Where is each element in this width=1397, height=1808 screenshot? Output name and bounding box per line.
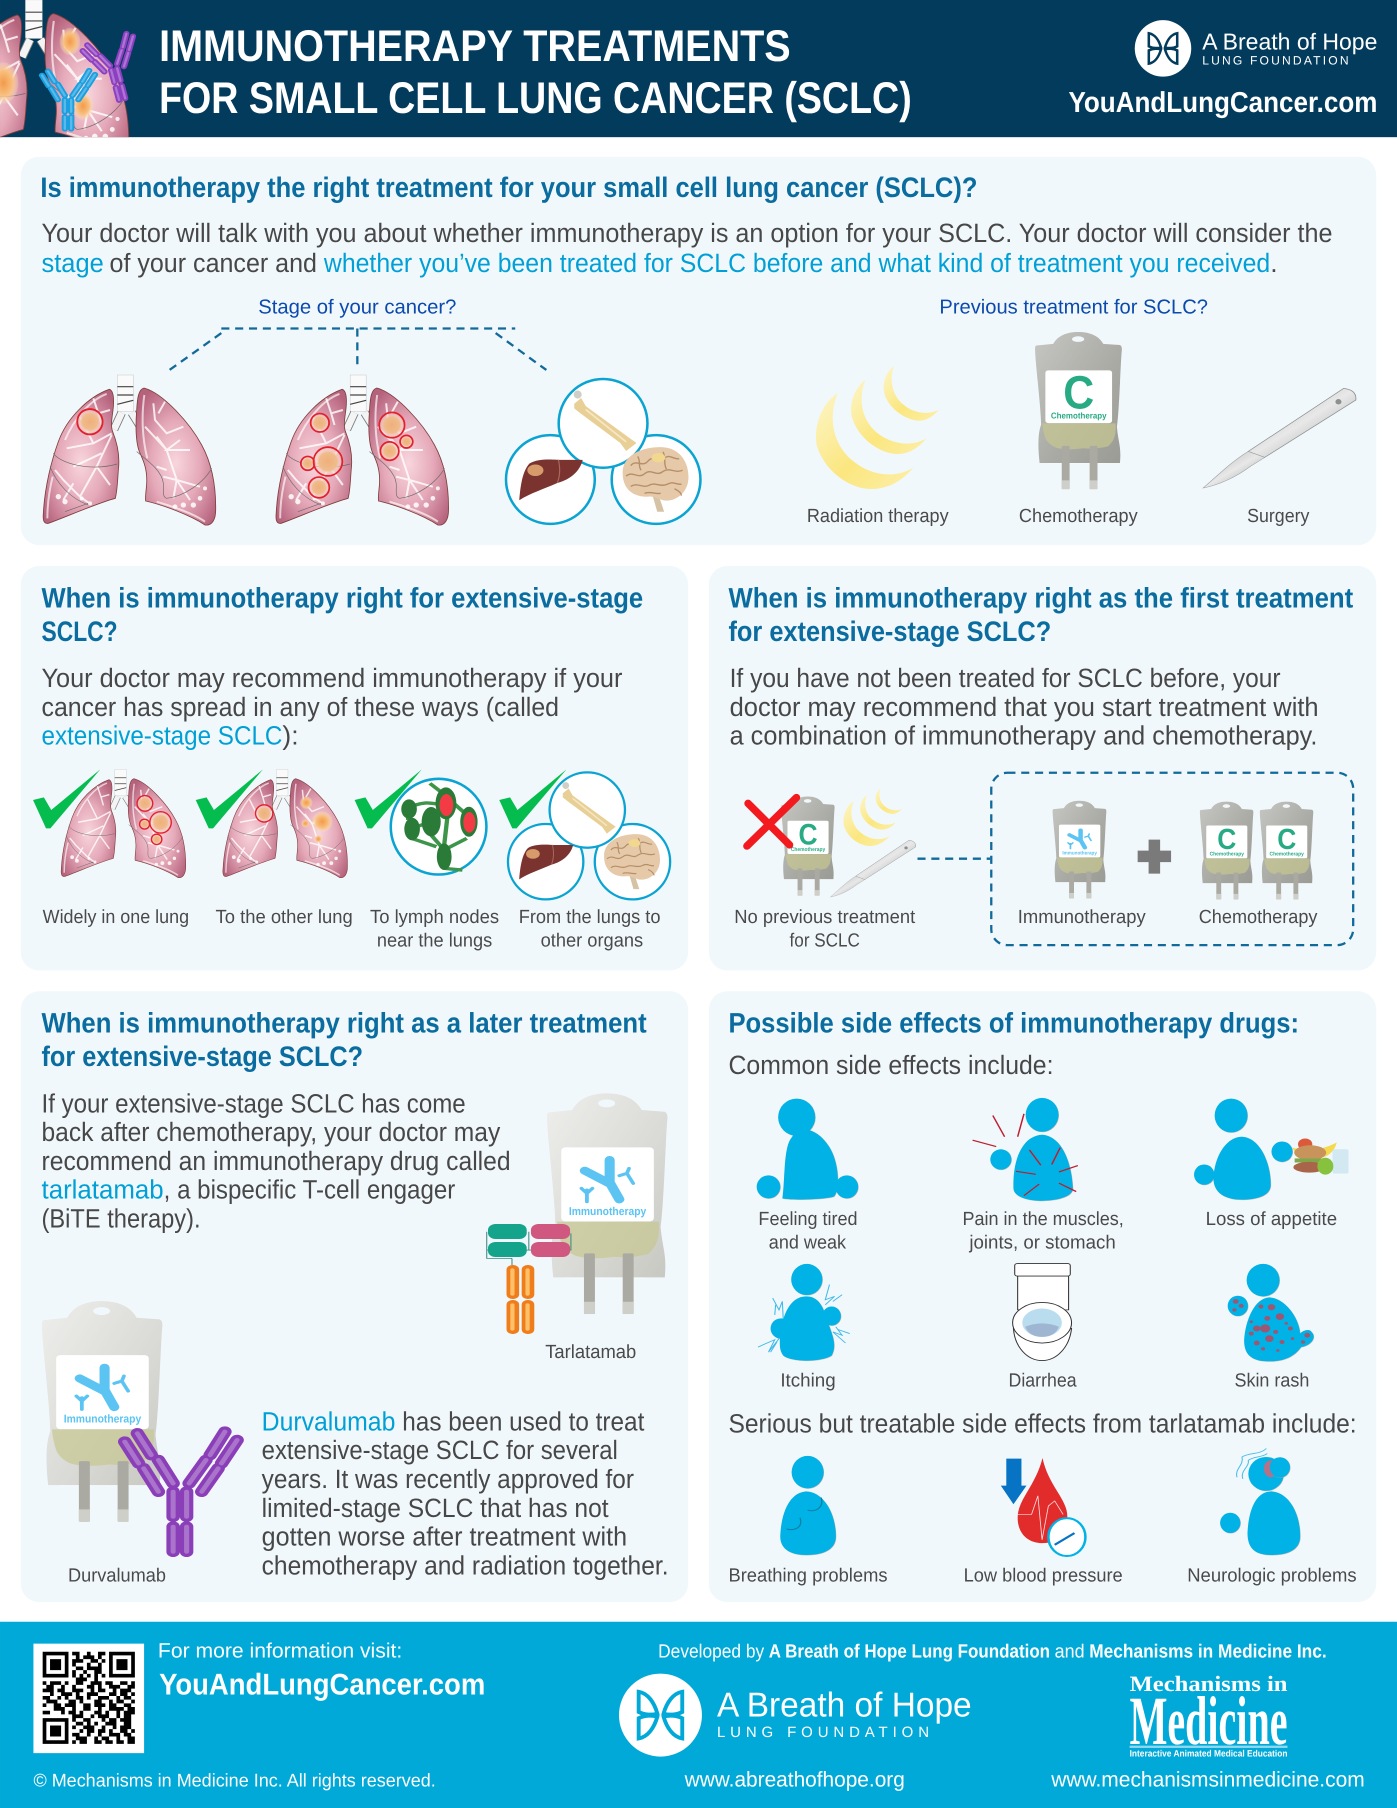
icon: red cross [747, 798, 796, 846]
durvalumab text: gotten worse after treatment with [262, 1521, 627, 1551]
durvalumab bag: Immunotherapy [64, 1413, 141, 1425]
no previous treatment illustration [734, 788, 916, 951]
durvalumab bag [42, 1301, 162, 1522]
logo: Mechanisms in Medicine: Medicine [1130, 1683, 1287, 1759]
icon: breathing [780, 1456, 836, 1555]
lungs: extensive stage [276, 375, 449, 525]
immunotherapy bag: Immunotherapy [1062, 850, 1097, 856]
durvalumab text: years. It was recently approved for [262, 1464, 634, 1494]
icon: radiation [816, 366, 939, 489]
body text: If you have not been treated for SCLC before, your [730, 663, 1281, 693]
footer [0, 1622, 1397, 1808]
chemotherapy bag two: Chemotherapy [1270, 850, 1304, 857]
durvalumab antibody [125, 1432, 237, 1552]
developed by: Developed by [658, 1641, 765, 1662]
icon: low blood pressure [1001, 1458, 1085, 1556]
title [159, 22, 912, 123]
developed by: A Breath of Hope Lung Foundation [769, 1641, 1050, 1662]
item: to the other lung [196, 769, 353, 928]
intro text: . [1270, 248, 1278, 278]
website links [684, 1767, 1365, 1791]
label: diarrhea: Diarrhea [1009, 1370, 1077, 1391]
icon: skin rash [1228, 1264, 1314, 1361]
body text: doctor may recommend that you start treatment with [730, 692, 1319, 722]
label: tired [758, 1209, 858, 1253]
label: skin rash: Skin rash [1234, 1370, 1309, 1391]
no previous treatment illustration: C [799, 818, 818, 851]
header banner [0, 0, 1397, 138]
chemotherapy bag one [1200, 802, 1253, 899]
heading: When is immunotherapy right as a later treatment [42, 1009, 647, 1040]
logo: A Breath of Hope: A Breath of Hope [1202, 30, 1377, 55]
combination labels [1018, 907, 1318, 928]
durvalumab text: chemotherapy and radiation together. [262, 1550, 669, 1580]
icon: scalpel [1203, 388, 1356, 488]
label: appetite: Loss of appetite [1206, 1209, 1337, 1230]
no previous treatment illustration: Chemotherapy [791, 846, 825, 852]
item: lymph nodes [355, 769, 499, 951]
title: FOR SMALL CELL LUNG CANCER (SCLC) [159, 74, 912, 123]
body text: Your doctor may recommend immunotherapy if your [42, 663, 623, 693]
intro text: stage [42, 248, 104, 278]
intro text: of your cancer and [110, 248, 317, 278]
title: IMMUNOTHERAPY TREATMENTS [159, 22, 791, 71]
item: other organs: other organs [541, 930, 643, 951]
logo: A Breath of Hope [1135, 20, 1377, 77]
developed by: Mechanisms in Medicine Inc. [1089, 1641, 1327, 1662]
label: pain: joints, or stomach [968, 1232, 1116, 1253]
subheading: stage: Stage of your cancer? [258, 295, 457, 318]
label: pain [962, 1209, 1124, 1253]
dashed connector and combination box [917, 773, 1353, 945]
tarlatamab text: tarlatamab [42, 1175, 164, 1204]
chemotherapy bag two [1260, 802, 1313, 899]
subheading: common: Common side effects include: [728, 1050, 1054, 1080]
label: neurologic: Neurologic problems [1187, 1565, 1357, 1586]
combination labels: Immunotherapy [1018, 907, 1147, 928]
treatment labels: Chemotherapy [1019, 506, 1138, 527]
tarlatamab text: (BiTE therapy). [42, 1203, 201, 1233]
item: lymph nodes: To lymph nodes [370, 907, 499, 928]
body text: ): [282, 720, 299, 750]
heading: When is immunotherapy right as the first treatment [728, 583, 1353, 614]
treatment labels: Radiation therapy [807, 506, 949, 527]
copyright: © Mechanisms in Medicine Inc. All rights reserved. [33, 1772, 436, 1791]
chemotherapy bag two: C [1277, 823, 1296, 855]
intro text: whether you’ve been treated for SCLC before and what kind of treatment you received [323, 248, 1270, 278]
panel: later treatment [21, 991, 688, 1602]
icon: chemo bag: Chemotherapy [1051, 411, 1107, 420]
logo: A Breath of Hope: LUNG FOUNDATION [1202, 54, 1349, 68]
tarlatamab bag: Immunotherapy [569, 1205, 646, 1218]
label: low blood pressure: Low blood pressure [964, 1565, 1123, 1586]
heading: Is immunotherapy the right treatment for your small cell lung cancer (SCLC)? [40, 173, 977, 204]
treatment labels [807, 506, 1310, 527]
item: widely in one lung: Widely in one lung [43, 907, 189, 928]
durvalumab text: limited-stage SCLC that has not [262, 1493, 609, 1523]
panel: first treatment [709, 566, 1376, 971]
durvalumab text: has been used to treat [402, 1406, 645, 1436]
label: tarlatamab: Tarlatamab [545, 1342, 636, 1362]
logo: Mechanisms in Medicine [1130, 1672, 1288, 1759]
logo: A Breath of Hope footer: LUNG FOUNDATION [717, 1723, 929, 1740]
illustration: lungs with antibodies [0, 0, 136, 138]
durvalumab text [262, 1406, 669, 1580]
more information: For more information visit: [158, 1639, 402, 1662]
heading: for extensive-stage SCLC? [728, 617, 1051, 648]
QR code [33, 1644, 144, 1753]
icon: chemo bag [1035, 332, 1122, 489]
chemotherapy bag one: C [1217, 823, 1236, 855]
heading: SCLC? [42, 617, 118, 648]
panel: is immunotherapy right [21, 157, 1376, 545]
item: to the other lung: To the other lung [216, 907, 353, 928]
website links: www.abreathofhope.org [684, 1767, 905, 1791]
immunotherapy bag [1053, 801, 1106, 898]
logo: A Breath of Hope footer: A Breath of Hope [717, 1686, 972, 1724]
body text: a combination of immunotherapy and chemotherapy. [730, 720, 1317, 750]
item: lymph nodes: near the lungs [377, 930, 492, 951]
combination labels: Chemotherapy [1199, 907, 1318, 928]
label: pain: Pain in the muscles, [962, 1209, 1124, 1230]
heading [42, 1009, 647, 1073]
durvalumab text: extensive-stage SCLC for several [262, 1435, 618, 1465]
subheading: previous treatment: Previous treatment for SCLC? [939, 295, 1208, 318]
tarlatamab text: , a bispecific T-cell engager [164, 1175, 456, 1204]
organs: liver, brain, bone [506, 379, 700, 524]
logo: Mechanisms in Medicine: Interactive Animated Medical Education [1130, 1749, 1288, 1759]
label: tired: Feeling tired [758, 1209, 858, 1230]
subheading: serious: Serious but treatable side effects from tarlatamab include: [728, 1409, 1357, 1438]
no previous treatment illustration: for SCLC [790, 930, 860, 951]
label: tired: and weak [769, 1232, 847, 1253]
icon: tired [757, 1099, 858, 1199]
plus sign [1138, 840, 1171, 874]
body text [42, 663, 623, 750]
body text: extensive-stage SCLC [42, 720, 282, 750]
heading [728, 583, 1353, 648]
heading: Possible side effects of immunotherapy drugs: [728, 1009, 1299, 1040]
icon: pain [973, 1098, 1078, 1201]
icon: neurologic [1220, 1448, 1300, 1555]
tarlatamab bag [547, 1093, 667, 1314]
website links: www.mechanismsinmedicine.com [1050, 1767, 1365, 1791]
icon: itching [758, 1264, 850, 1361]
icon: loss of appetite [1194, 1099, 1349, 1200]
dashed tree connector [169, 328, 546, 370]
developed by: and [1055, 1641, 1085, 1662]
tarlatamab text [42, 1088, 511, 1233]
panel: extensive-stage [21, 566, 688, 971]
intro text [42, 218, 1332, 278]
item: other organs: From the lungs to [519, 907, 660, 928]
body text [730, 663, 1319, 750]
heading [42, 583, 643, 648]
more information [158, 1639, 485, 1701]
logo: A Breath of Hope footer [619, 1674, 972, 1757]
tarlatamab text: recommend an immunotherapy drug called [42, 1146, 511, 1176]
treatment labels: Surgery [1247, 506, 1310, 527]
tarlatamab text: If your extensive-stage SCLC has come [42, 1088, 466, 1118]
item: other organs [499, 769, 670, 951]
lungs: limited stage [43, 375, 216, 525]
more information: YouAndLungCancer.com [159, 1667, 485, 1701]
developed by [658, 1641, 1327, 1662]
chemotherapy bag one: Chemotherapy [1210, 850, 1244, 857]
label: durvalumab: Durvalumab [68, 1565, 166, 1586]
tarlatamab text: back after chemotherapy, your doctor may [42, 1117, 501, 1147]
tarlatamab antibody [487, 1224, 571, 1334]
panel: side effects [709, 991, 1376, 1602]
item: widely in one lung [33, 769, 189, 928]
heading: When is immunotherapy right for extensive-stage [42, 583, 643, 614]
icon: chemo bag: C [1063, 366, 1094, 418]
no previous treatment illustration: No previous treatment [734, 907, 916, 928]
durvalumab text: Durvalumab [262, 1406, 395, 1436]
heading: for extensive-stage SCLC? [42, 1042, 363, 1073]
label: breathing: Breathing problems [728, 1565, 888, 1586]
icon: toilet [1013, 1264, 1072, 1361]
logo: Mechanisms in Medicine: Mechanisms in [1130, 1672, 1288, 1697]
intro text: Your doctor will talk with you about whether immunotherapy is an option for your SCLC. Your doctor will consider the [42, 218, 1332, 248]
body text: cancer has spread in any of these ways (called [42, 692, 559, 722]
label: itching: Itching [780, 1370, 836, 1391]
